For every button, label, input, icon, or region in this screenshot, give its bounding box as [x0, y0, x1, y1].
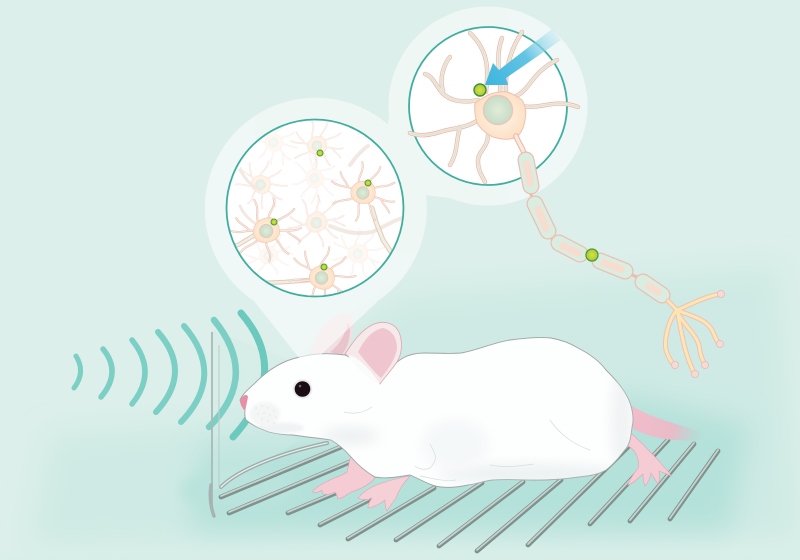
faint neurons — [227, 122, 402, 256]
axon terminal branches — [665, 290, 725, 378]
mouse nose and whisker pad — [240, 395, 280, 426]
callout halos with connector and pointer — [205, 6, 588, 368]
mouse back ear — [310, 313, 353, 358]
wire floor bars — [221, 439, 718, 551]
blue arrow — [485, 29, 561, 85]
neuron dendrites — [410, 32, 578, 182]
mouse front ear — [345, 322, 401, 384]
strong neurons — [331, 161, 396, 222]
mouse — [240, 313, 702, 511]
mouse front paw rear — [312, 455, 375, 499]
green marker on neuron — [474, 84, 486, 96]
axons in network — [226, 208, 391, 283]
halo: single neuron — [388, 6, 588, 206]
green marker on axon — [586, 249, 598, 261]
mouse front paw front — [358, 476, 410, 511]
glass wall of the cage — [210, 332, 327, 516]
magnified circle: neuron network — [226, 118, 404, 298]
mouse hind foot — [627, 430, 671, 486]
magnified circle: single neuron — [409, 27, 578, 185]
mouse body — [240, 338, 633, 487]
connector beam between circles — [373, 112, 478, 205]
glass wall tint — [212, 330, 303, 490]
axon with myelin segments — [516, 136, 662, 295]
mouse eye — [293, 380, 312, 398]
halo: neuron network, with pointer to mouse head — [205, 98, 427, 368]
mouse tail — [629, 404, 702, 440]
mouse fur strokes — [344, 407, 590, 481]
neuron cell body — [475, 92, 526, 139]
neuron nucleus — [484, 96, 512, 124]
sound waves — [74, 313, 265, 437]
green markers — [271, 150, 371, 270]
myelin segment outlines — [526, 160, 662, 295]
